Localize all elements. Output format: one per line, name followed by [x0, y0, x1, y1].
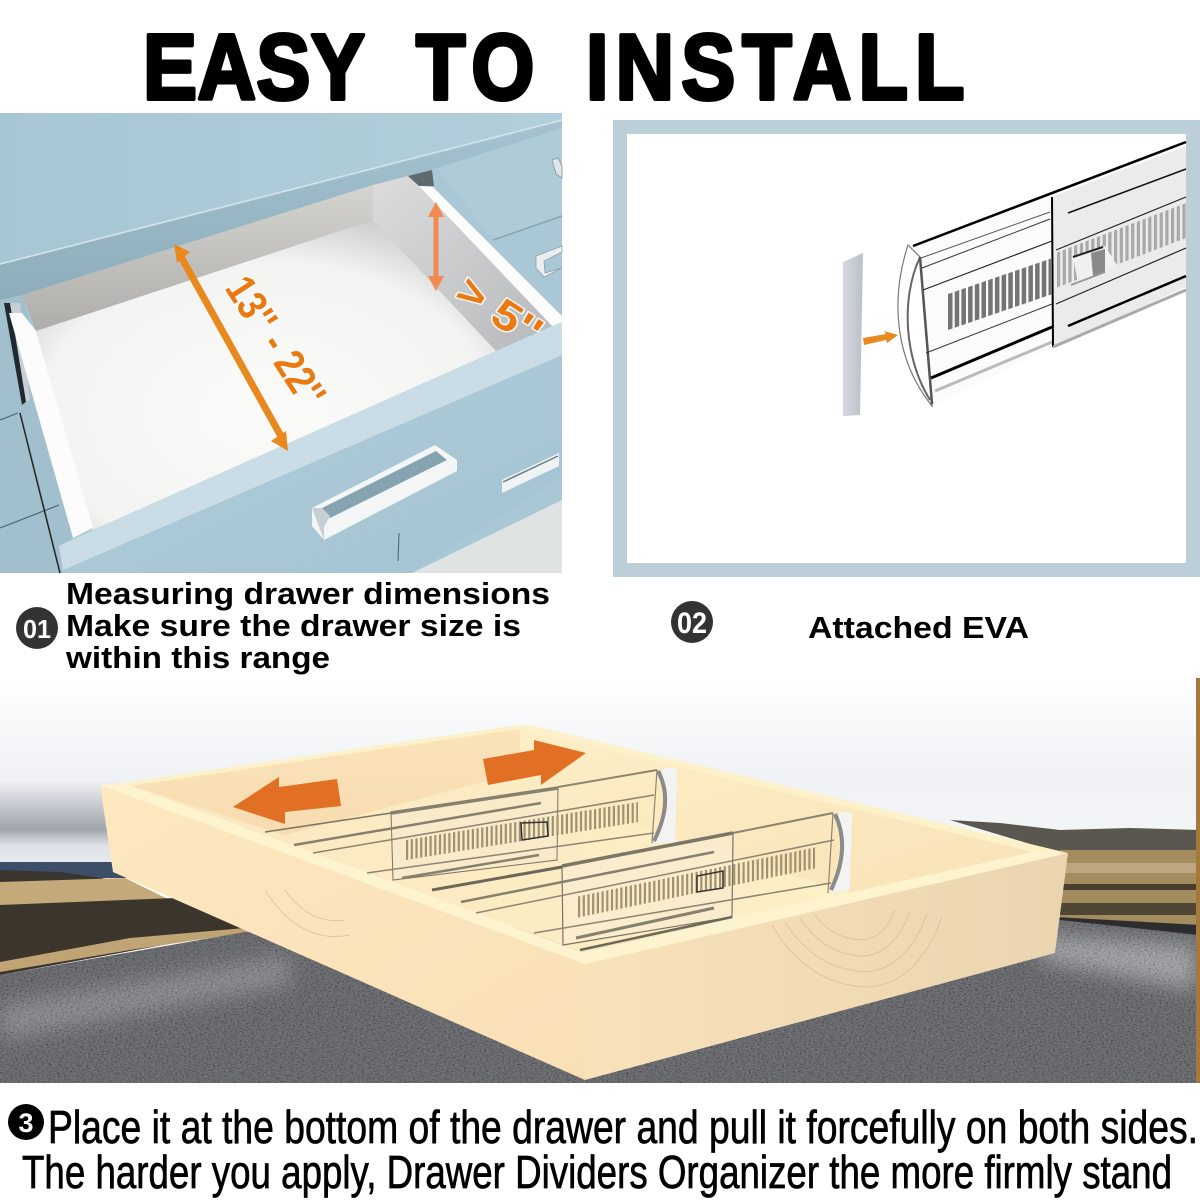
badge 02: 02 — [677, 607, 707, 640]
caption 01 — [16, 576, 550, 675]
caption text: Measuring drawer dimensions — [66, 576, 550, 611]
badge 01: 01 — [23, 614, 51, 644]
panel: drawer measuring photo — [0, 113, 562, 573]
EVA pad back — [654, 768, 677, 843]
landscape right — [950, 820, 1200, 940]
small handle — [502, 453, 559, 493]
nose cap — [898, 245, 932, 406]
label: over 5 inches: > 5'' — [448, 266, 551, 356]
tray rim — [100, 783, 1068, 964]
arrow: height over 5 inches — [428, 202, 444, 291]
post — [1196, 678, 1200, 1083]
vent slots right — [1057, 220, 1186, 270]
caption text: within this range — [65, 640, 330, 675]
badge 03 — [8, 1104, 44, 1140]
tray inner floor — [123, 725, 1033, 952]
counter front edge — [0, 122, 562, 300]
drawer front lip — [59, 322, 562, 570]
tray right face — [585, 853, 1068, 1080]
landscape left — [0, 862, 250, 975]
orange arrow — [863, 331, 898, 345]
divider — [898, 142, 1186, 406]
divider: front — [432, 813, 834, 950]
drawer floor — [36, 220, 496, 530]
panel: attached EVA illustration — [620, 127, 1193, 570]
arrow left — [233, 777, 341, 824]
EVA pad front — [830, 812, 852, 893]
drawer handle — [312, 445, 457, 540]
frame — [620, 127, 1193, 570]
tray left face — [100, 785, 585, 1080]
title: INSTALL — [586, 16, 964, 119]
drawer right inner wall — [373, 176, 562, 351]
wood grain — [265, 890, 942, 987]
vent slots left — [948, 276, 1052, 312]
road — [0, 920, 1200, 1083]
slider clip — [1071, 246, 1117, 285]
arrow: depth 13-22 inches — [174, 244, 288, 451]
left clouds — [0, 780, 120, 862]
road shine — [0, 935, 1196, 1040]
caption text — [65, 576, 550, 675]
cabinet right drawers — [437, 128, 562, 313]
caption 02 — [671, 601, 1029, 645]
drawer rim right — [419, 186, 562, 327]
title — [143, 16, 964, 119]
tray back-right wall — [520, 725, 1033, 893]
drawer left wall — [9, 313, 93, 538]
arrow right — [483, 740, 586, 785]
tray back-left wall — [123, 725, 520, 835]
badge 01 — [16, 607, 58, 649]
EVA strip — [843, 253, 863, 416]
title: TO — [416, 16, 534, 119]
drawer front — [59, 322, 562, 573]
label: 13-22 inches: 13'' - 22'' — [216, 267, 335, 415]
caption 03 — [8, 1101, 1198, 1198]
panel: tray with dividers — [0, 678, 1200, 1083]
caption text: Make sure the drawer size is — [66, 608, 521, 643]
drawer lower right area — [412, 500, 562, 573]
divider: back — [265, 770, 657, 880]
left cabinet fronts — [0, 295, 93, 573]
sky — [0, 678, 1200, 868]
drawer inner back wall — [22, 185, 373, 331]
badge 03: 3 — [18, 1108, 34, 1138]
countertop — [0, 113, 562, 263]
road speckle — [0, 920, 1196, 1083]
caption text: Attached EVA — [808, 610, 1029, 645]
title: EASY — [143, 16, 365, 119]
badge 02 — [671, 601, 713, 643]
